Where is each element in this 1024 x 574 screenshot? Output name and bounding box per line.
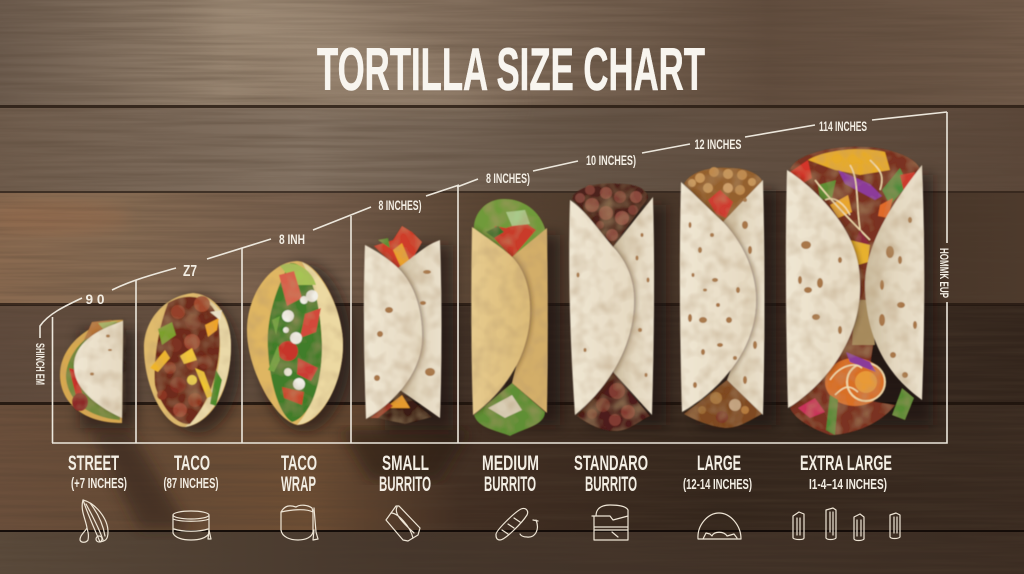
- extra large burrito: [786, 147, 924, 435]
- column label: small burrito: BURRITO: [379, 473, 431, 496]
- column label: standard burrito: [574, 452, 648, 496]
- dimension lines: [40, 112, 947, 443]
- column label: small burrito: SMALL: [382, 452, 429, 475]
- standard burrito: [569, 184, 654, 431]
- column label: taco wrap: WRAP: [281, 473, 316, 496]
- title: TORTILLA SIZE CHART: [317, 36, 705, 103]
- size label: 10 inches: 10 INCHES): [586, 152, 636, 168]
- column label: taco wrap: TACO: [281, 452, 317, 475]
- column label: street: [68, 452, 127, 492]
- taco: [144, 293, 231, 427]
- column label: taco: [164, 452, 219, 492]
- food shadows: [80, 175, 933, 433]
- column label: extra large: [800, 452, 892, 493]
- icon: standard burrito: [592, 505, 628, 540]
- large burrito: [680, 167, 764, 428]
- column label: extra large: I1-4–14 INCHES): [809, 477, 887, 493]
- size label: 8 inches medium: 8 INCHES): [486, 170, 530, 186]
- small burrito: [364, 226, 442, 424]
- street taco: [60, 320, 123, 423]
- column label: taco: TACO: [174, 452, 210, 475]
- column label: medium burrito: BURRITO: [484, 473, 536, 496]
- column label: small burrito: [379, 452, 431, 496]
- column label: large: (12-14 INCHES): [683, 477, 752, 493]
- column label: medium burrito: [482, 452, 539, 496]
- icon: small burrito: [386, 506, 420, 541]
- size label: 8 inches small: 8 INCHES): [378, 197, 422, 213]
- column label: extra large: EXTRA LARGE: [800, 452, 892, 475]
- size label: Z7: Z7: [183, 263, 197, 280]
- column label: medium burrito: MEDIUM: [482, 452, 539, 475]
- column label: large: [683, 452, 752, 493]
- vertical height label right: HOMMK EUP: [937, 248, 951, 298]
- size label: 8 INH: 8 INH: [279, 231, 305, 247]
- icon: extra large wraps: [793, 508, 900, 540]
- column label: large: LARGE: [697, 452, 741, 475]
- column label: standard burrito: BURRITO: [585, 473, 637, 496]
- icon: large burrito: [698, 513, 741, 539]
- column label: taco wrap: [281, 452, 317, 496]
- size label: 12 inches: 12 INCHES: [694, 136, 742, 152]
- icon: taco wrap: [281, 505, 318, 540]
- size label: 114 inches: 114 INCHES: [819, 118, 867, 134]
- column label: street: STREET: [68, 452, 119, 475]
- column label: standard burrito: STANDARO: [574, 452, 648, 475]
- column label: street: (+7 INCHES): [71, 476, 127, 492]
- icon: taco bowl: [173, 511, 211, 540]
- icon: medium burrito: [496, 508, 538, 540]
- medium burrito: [471, 199, 548, 436]
- column label: taco: (87 INCHES): [164, 476, 219, 492]
- taco wrap: [247, 261, 343, 425]
- icon: street taco: [80, 500, 108, 542]
- vertical height label left: SHINCH EM: [33, 343, 47, 385]
- size label: 9 0: 9 0: [86, 291, 105, 307]
